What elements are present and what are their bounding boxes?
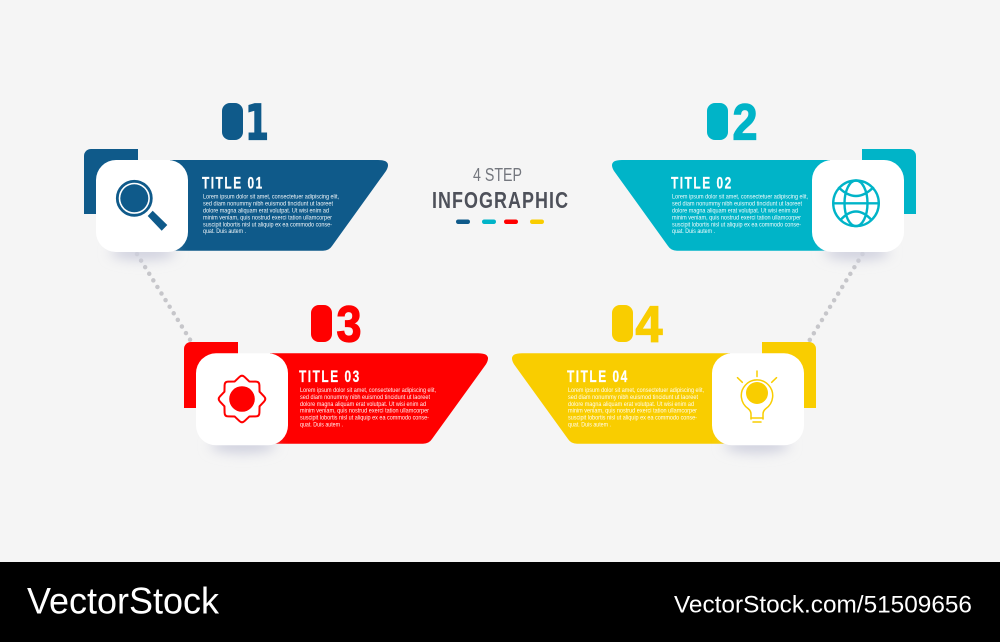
body text: Lorem ipsum dolor sit amet, consectetuer adipiscing elit, — [672, 195, 808, 201]
banner — [270, 353, 488, 444]
body text: suscipit lobortis nisl ut aliquip ex ea commodo conse- — [300, 416, 429, 422]
white icon card — [96, 160, 188, 252]
number 01 — [222, 94, 269, 151]
icon: sun badge — [219, 376, 265, 422]
footer bar — [0, 562, 1000, 642]
title: TITLE 04 — [567, 368, 629, 387]
body text: minim veniam, quis nostrud exerci tation ullamcorper — [203, 215, 332, 221]
icon: magnifier — [117, 181, 167, 231]
body text: minim veniam, quis nostrud exerci tation ullamcorper — [568, 409, 697, 415]
number 01: 1 — [245, 94, 269, 151]
accent square — [184, 342, 238, 408]
body text — [203, 195, 339, 235]
panel: step 01 — [84, 94, 388, 260]
panel: step 03 — [184, 295, 488, 453]
number 04: 4 — [636, 295, 663, 352]
body text — [568, 388, 704, 428]
card shadow — [110, 244, 176, 260]
title: TITLE 03 — [299, 368, 361, 387]
white icon card — [712, 353, 804, 445]
body text: suscipit lobortis nisl ut aliquip ex ea commodo conse- — [203, 222, 332, 228]
title: infographic: INFOGRAPHIC — [432, 188, 569, 214]
panel: step 04 — [512, 295, 816, 453]
body text: minim veniam, quis nostrud exerci tation ullamcorper — [300, 409, 429, 415]
body text: sed diam nonummy nibh euismod tincidunt ut laoreet — [203, 202, 333, 208]
body text: Lorem ipsum dolor sit amet, consectetuer adipiscing elit, — [300, 388, 436, 394]
accent square — [862, 149, 916, 214]
body text: dolore magna aliquam erat volutpat. Ut wisi enim ad — [672, 208, 798, 214]
card shadow — [210, 437, 276, 453]
title: TITLE 01 — [202, 175, 264, 193]
body text: dolore magna aliquam erat volutpat. Ut wisi enim ad — [568, 402, 694, 408]
white icon card — [196, 353, 288, 445]
icon: light bulb — [738, 371, 776, 422]
body text: minim veniam, quis nostrud exerci tation ullamcorper — [672, 215, 801, 221]
body text — [300, 388, 436, 428]
dotted connector: step 2 to step 4 — [808, 254, 862, 342]
body text: Lorem ipsum dolor sit amet, consectetuer adipiscing elit, — [203, 195, 339, 201]
body text — [672, 195, 808, 235]
panel: step 02 — [612, 94, 916, 260]
banner — [512, 353, 730, 444]
number 04 — [612, 295, 663, 352]
white icon card — [812, 160, 904, 252]
subtitle: 4 step: 4 STEP — [473, 165, 522, 185]
body text: suscipit lobortis nisl ut aliquip ex ea commodo conse- — [672, 222, 801, 228]
card shadow — [724, 437, 790, 453]
colour legend dashes — [456, 220, 544, 224]
body text: quat. Duis autem . — [300, 422, 343, 428]
body text: quat. Duis autem . — [203, 229, 246, 235]
accent square — [84, 149, 138, 214]
number 02 — [707, 94, 758, 150]
body text: quat. Duis autem . — [672, 229, 715, 235]
body text: sed diam nonummy nibh euismod tincidunt ut laoreet — [300, 395, 430, 401]
footer brand: VectorStock — [27, 580, 219, 622]
banner — [170, 160, 388, 251]
body text: dolore magna aliquam erat volutpat. Ut wisi enim ad — [300, 402, 426, 408]
footer image id: VectorStock.com/51509656 — [674, 592, 972, 618]
accent square — [762, 342, 816, 408]
number 03 — [311, 295, 362, 352]
body text: quat. Duis autem . — [568, 422, 611, 428]
center heading — [432, 165, 569, 224]
title: TITLE 02 — [671, 175, 733, 193]
banner — [612, 160, 830, 251]
body text: sed diam nonummy nibh euismod tincidunt ut laoreet — [672, 202, 802, 208]
card shadow — [824, 244, 890, 260]
body text: dolore magna aliquam erat volutpat. Ut wisi enim ad — [203, 208, 329, 214]
body text: sed diam nonummy nibh euismod tincidunt ut laoreet — [568, 395, 698, 401]
dotted connector: step 1 to step 3 — [137, 254, 192, 342]
number 02: 2 — [732, 94, 758, 150]
icon: globe — [833, 180, 879, 226]
number 03: 3 — [336, 295, 362, 352]
body text: suscipit lobortis nisl ut aliquip ex ea commodo conse- — [568, 416, 697, 422]
body text: Lorem ipsum dolor sit amet, consectetuer adipiscing elit, — [568, 388, 704, 394]
